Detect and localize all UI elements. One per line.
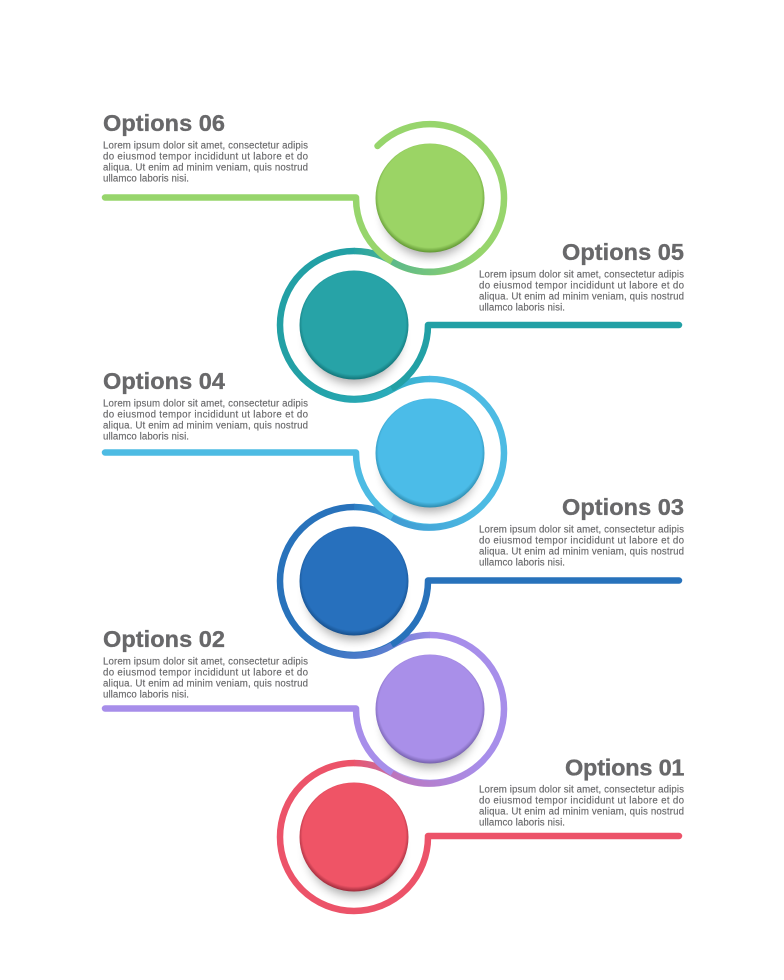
text block: option 04 description: aliqua. Ut enim ad minim veniam, quis nostrud [103, 420, 308, 432]
text block: option 03 description: Lorem ipsum dolor sit amet, consectetur adipis [479, 524, 684, 536]
text block: option 03 description [479, 524, 684, 568]
text block: option 06 description: ullamco laboris nisi. [103, 174, 189, 184]
connector: green ring and leader line [105, 124, 504, 272]
panel: option 01 [280, 754, 684, 911]
heading: options 05: Options 05 [562, 239, 684, 265]
text block: option 01 description: Lorem ipsum dolor sit amet, consectetur adipis [479, 784, 684, 796]
text block: option 06 description: aliqua. Ut enim ad minim veniam, quis nostrud [103, 162, 308, 174]
text block: option 05 description: ullamco laboris nisi. [479, 302, 565, 314]
text block: option 03 description: ullamco laboris nisi. [479, 558, 565, 568]
connector: red ring and leader line [280, 763, 679, 911]
text block: option 01 description: ullamco laboris nisi. [479, 818, 565, 828]
panel: option 04 [103, 368, 504, 528]
text block: option 06 description: Lorem ipsum dolor sit amet, consectetur adipis [103, 140, 308, 152]
circle: green button [376, 144, 484, 257]
heading: options 02: Options 02 [103, 626, 225, 652]
text block: option 01 description [479, 784, 684, 828]
heading: options 04: Options 04 [103, 368, 225, 394]
circle: purple button [376, 654, 484, 768]
connector: purple ring and leader line [105, 635, 504, 784]
heading: options 06: Options 06 [103, 110, 225, 136]
connector: blue ring and leader line [280, 507, 679, 656]
text block: option 01 description: aliqua. Ut enim ad minim veniam, quis nostrud [479, 806, 684, 818]
circle: red button [300, 782, 408, 896]
circle: sky blue button [376, 398, 484, 512]
heading: options 01: Options 01 [565, 754, 684, 780]
text block: option 05 description: do eiusmod tempor incididunt ut labore et do [479, 280, 684, 292]
connector: teal ring and leader line [280, 251, 679, 400]
text block: option 02 description: do eiusmod tempor incididunt ut labore et do [103, 668, 308, 678]
panel: option 05 [280, 239, 684, 400]
panel: option 06 [103, 110, 504, 272]
text block: option 06 description [103, 140, 308, 184]
text block: option 02 description [103, 656, 308, 700]
circle: blue button [300, 526, 408, 640]
text block: option 05 description: aliqua. Ut enim ad minim veniam, quis nostrud [479, 292, 684, 302]
text block: option 06 description: do eiusmod tempor incididunt ut labore et do [103, 152, 308, 162]
text block: option 04 description: ullamco laboris nisi. [103, 432, 189, 442]
text block: option 04 description: Lorem ipsum dolor sit amet, consectetur adipis [103, 398, 308, 410]
text block: option 03 description: do eiusmod tempor incididunt ut labore et do [479, 536, 684, 546]
panel: option 02 [103, 626, 504, 784]
text block: option 02 description: Lorem ipsum dolor sit amet, consectetur adipis [103, 656, 308, 668]
text block: option 01 description: do eiusmod tempor incididunt ut labore et do [479, 796, 684, 806]
circle: teal button [300, 270, 408, 384]
text block: option 03 description: aliqua. Ut enim ad minim veniam, quis nostrud [479, 546, 684, 558]
text block: option 05 description [479, 270, 684, 314]
connector: sky blue ring and leader line [105, 379, 504, 528]
panel: option 03 [280, 494, 684, 656]
text block: option 02 description: ullamco laboris nisi. [103, 690, 189, 700]
heading: options 03: Options 03 [562, 494, 684, 520]
text block: option 02 description: aliqua. Ut enim ad minim veniam, quis nostrud [103, 678, 308, 690]
text block: option 04 description [103, 398, 308, 442]
text block: option 05 description: Lorem ipsum dolor sit amet, consectetur adipis [479, 270, 684, 280]
text block: option 04 description: do eiusmod tempor incididunt ut labore et do [103, 410, 308, 420]
